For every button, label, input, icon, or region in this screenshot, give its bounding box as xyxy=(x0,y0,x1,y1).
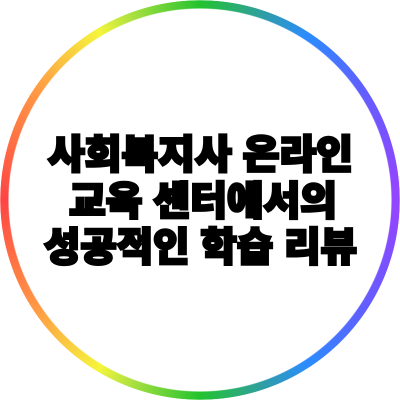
title line 2: 교육 센터에서의 xyxy=(69,180,337,224)
title line 3: 성공적인 학습 리뷰 xyxy=(44,226,357,270)
title line 1: 사회복지사 온라인 xyxy=(48,134,353,178)
